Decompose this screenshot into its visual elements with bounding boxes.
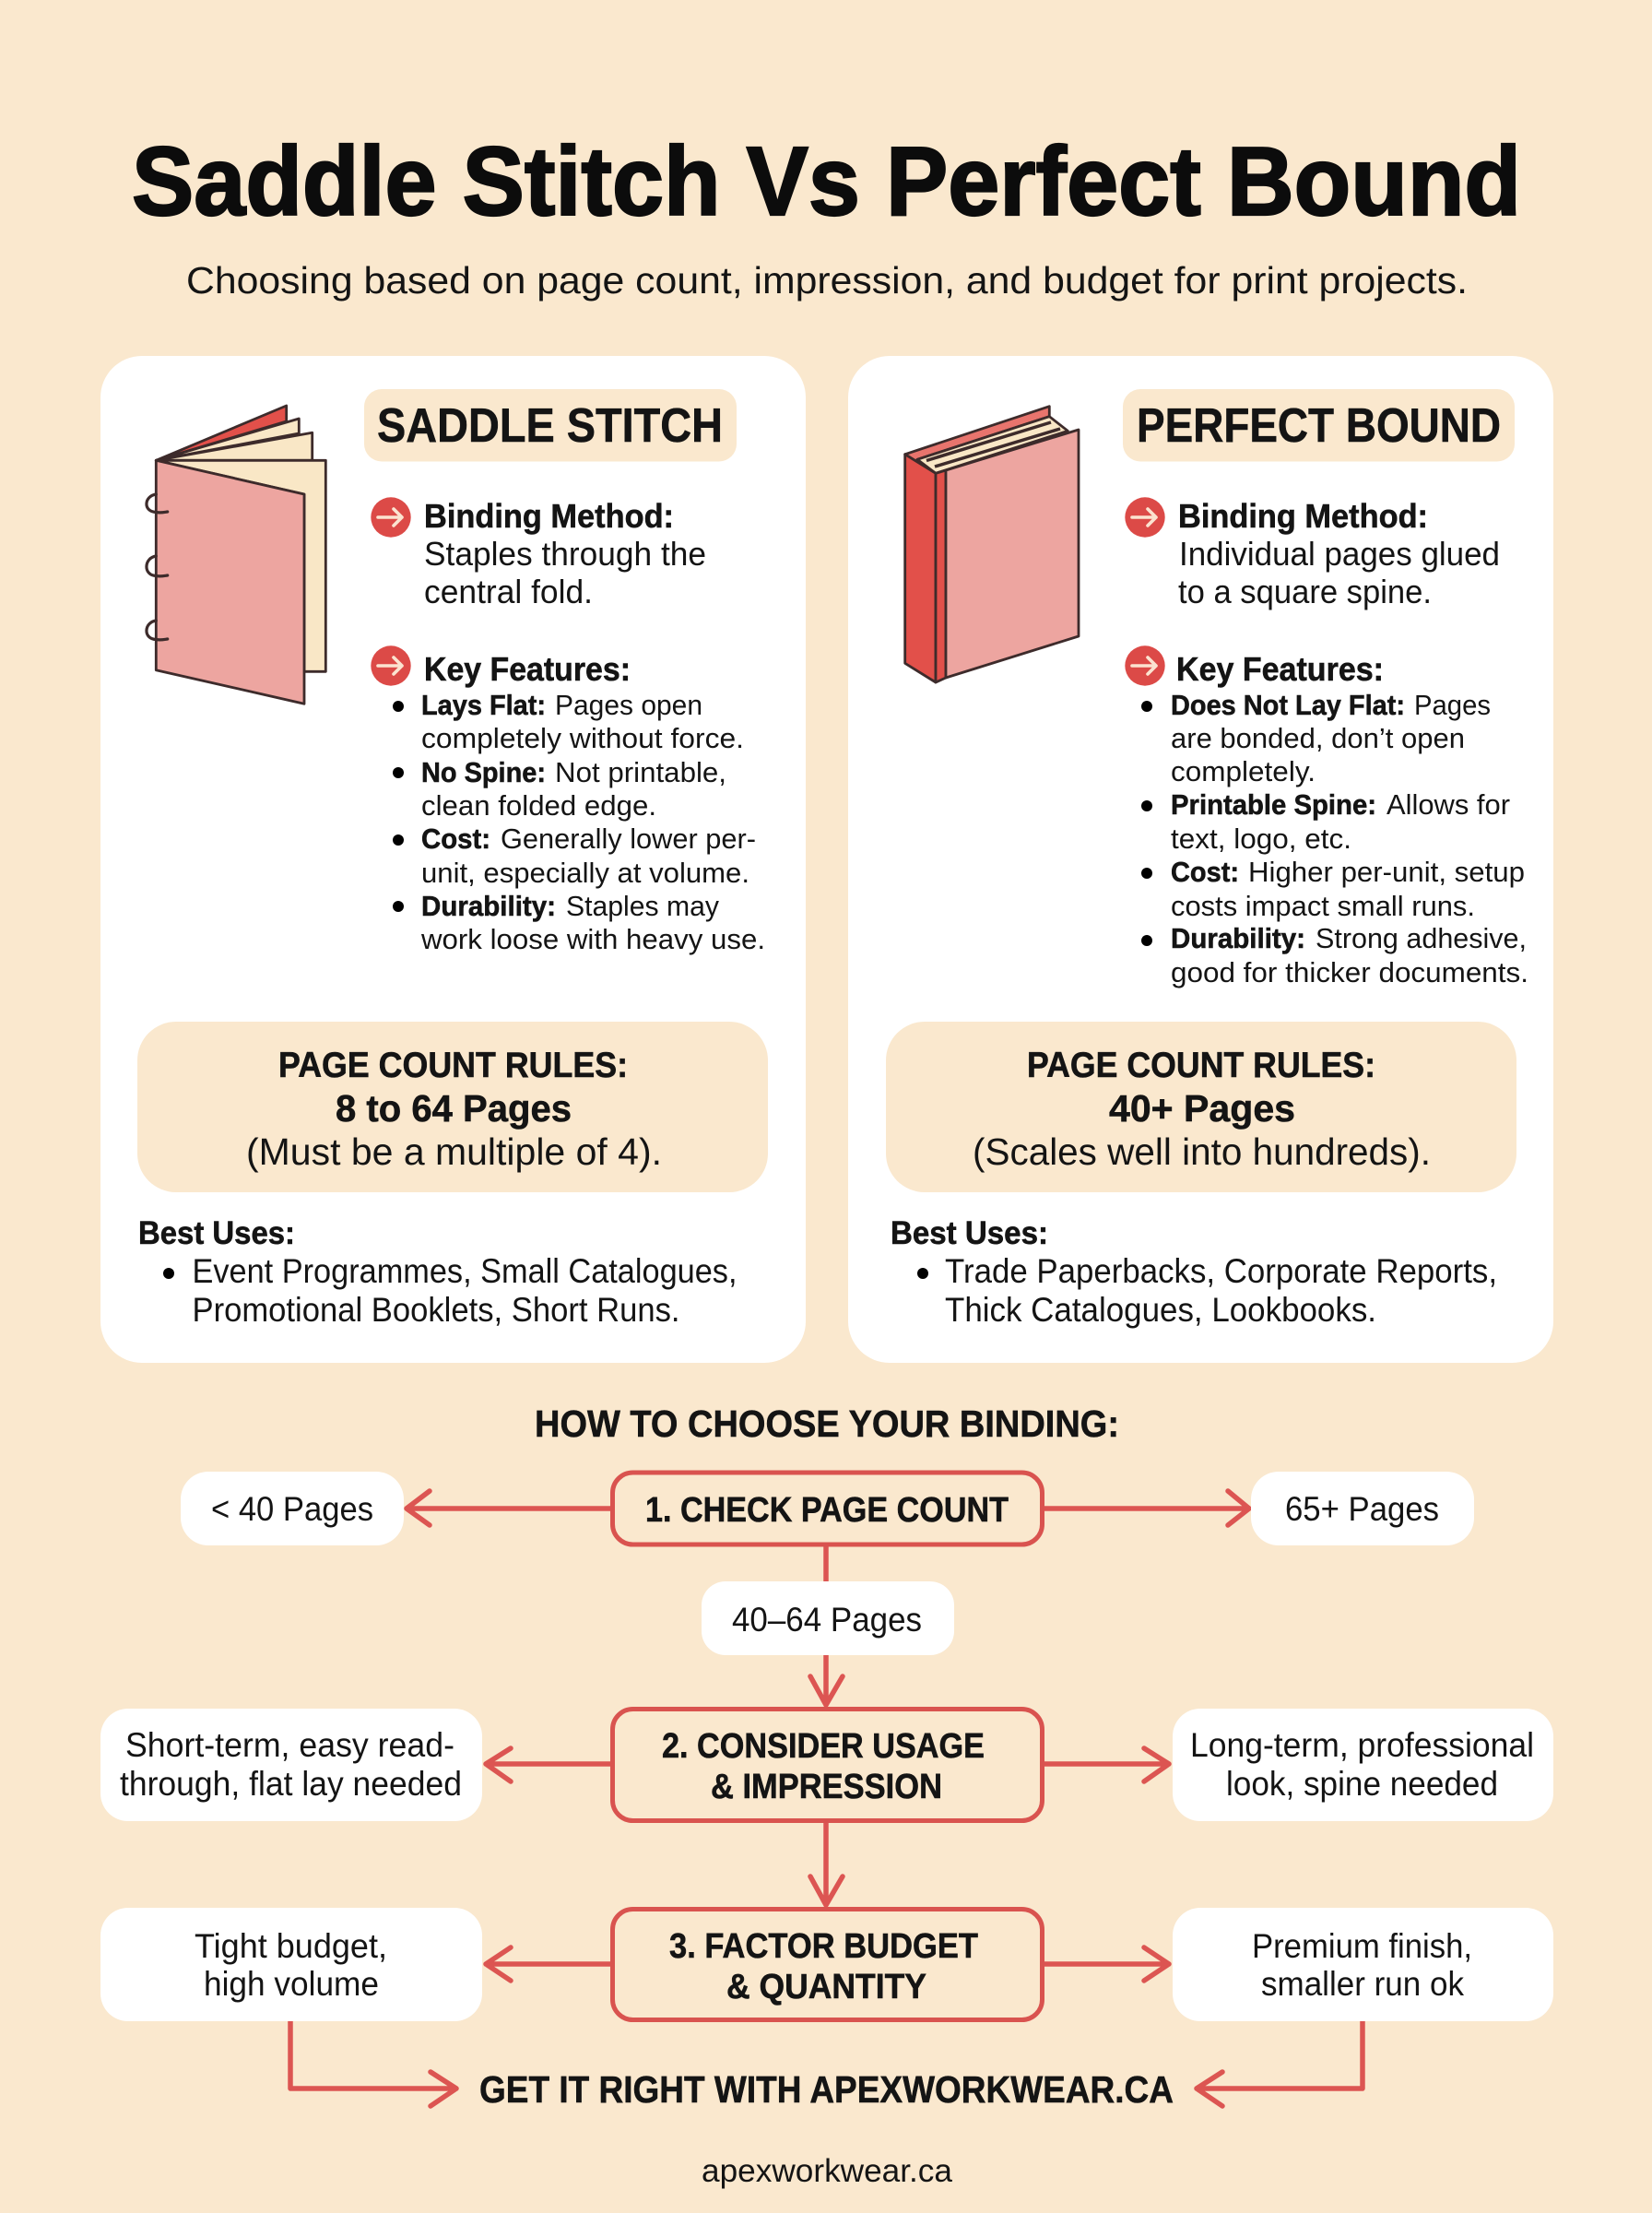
node: long-term: [1173, 1709, 1553, 1821]
text: binding method: Binding Method:: [424, 497, 674, 535]
node: short-term: through, flat lay needed: [120, 1765, 462, 1803]
node: premium finish: Premium finish,: [1252, 1927, 1472, 1965]
list: key features: No Spine:: [421, 756, 546, 788]
subtitle: Choosing based on page count, impression, and budget for print projects.: [186, 259, 1468, 302]
list: key features: Staples may: [566, 890, 719, 922]
list: key features: Does Not Lay Flat:: [1171, 689, 1405, 721]
heading pill: perfect bound: [1123, 389, 1515, 461]
node: step 3 factor budget: [612, 1909, 1042, 2019]
flowchart heading: HOW TO CHOOSE YOUR BINDING:: [535, 1402, 1119, 1445]
callout: page count rules: [886, 1022, 1516, 1192]
arrow: step 2 to long-term: [1043, 1748, 1169, 1781]
heading pill: saddle stitch: SADDLE STITCH: [377, 399, 723, 453]
node: short-term: [100, 1709, 482, 1821]
list: key features: [393, 689, 765, 955]
node: under 40 pages: < 40 Pages: [211, 1490, 373, 1528]
node: step 2 consider usage: & IMPRESSION: [711, 1768, 942, 1806]
card background: [848, 356, 1553, 1363]
arrow: step 1 down to step 2: [810, 1546, 843, 1705]
list: key features: good for thicker documents.: [1171, 956, 1528, 988]
callout: page count rules: (Must be a multiple of 4).: [246, 1130, 662, 1173]
node: tight budget: [100, 1908, 482, 2021]
list: key features: unit, especially at volume.: [421, 857, 749, 889]
icon: perfect bound book: [905, 407, 1079, 682]
list: key features: Pages: [1414, 689, 1491, 721]
arrow: step 3 to premium finish: [1043, 1947, 1169, 1981]
node: 40-64 pages: [702, 1581, 954, 1655]
title: Saddle Stitch Vs Perfect Bound: [132, 127, 1521, 236]
callout: page count rules: [137, 1022, 768, 1192]
node: tight budget: Tight budget,: [195, 1927, 387, 1965]
list: key features: [1141, 689, 1528, 988]
node: 40-64 pages: 40–64 Pages: [732, 1601, 922, 1639]
list: key features: completely.: [1171, 755, 1316, 787]
footer url: apexworkwear.ca: [702, 2153, 953, 2189]
list: key features: Pages open: [555, 689, 702, 721]
list: key features: costs impact small runs.: [1171, 890, 1475, 922]
node: premium finish: [1173, 1908, 1553, 2021]
list: key features: are bonded, don’t open: [1171, 722, 1465, 754]
list: key features: Allows for: [1386, 788, 1510, 821]
heading pill: perfect bound: PERFECT BOUND: [1137, 399, 1501, 453]
list: key features: Strong adhesive,: [1316, 922, 1527, 954]
heading pill: saddle stitch: [364, 389, 737, 461]
arrow: tight budget to call to action: [290, 2021, 456, 2106]
list: key features: Lays Flat:: [421, 689, 546, 721]
node: short-term: Short-term, easy read-: [125, 1726, 454, 1764]
node: tight budget: high volume: [204, 1965, 379, 2003]
text: binding method: Individual pages glued: [1179, 535, 1500, 573]
arrow: step 2 to short-term: [486, 1748, 612, 1781]
text: binding method: [424, 497, 706, 610]
flowchart: how to choose: [100, 1472, 1553, 2106]
node: step 1 check page count: 1. CHECK PAGE COUNT: [645, 1491, 1009, 1530]
text: binding method: Binding Method:: [1178, 497, 1428, 535]
text: best uses: [891, 1215, 1497, 1329]
icon: arrow bullet key features: [1125, 645, 1165, 686]
node: premium finish: smaller run ok: [1261, 1965, 1464, 2003]
text: best uses: [138, 1215, 738, 1329]
call to action: GET IT RIGHT WITH APEXWORKWEAR.CA: [479, 2068, 1174, 2111]
list: key features: Durability:: [1171, 922, 1305, 954]
list: key features: text, logo, etc.: [1171, 822, 1351, 855]
panel: perfect bound: [848, 356, 1553, 1363]
list: key features: clean folded edge.: [421, 789, 656, 822]
list: key features: Generally lower per-: [501, 822, 756, 855]
callout: page count rules: PAGE COUNT RULES:: [1027, 1046, 1375, 1085]
icon: saddle stitched booklet: [147, 406, 325, 704]
node: step 3 factor budget: & QUANTITY: [726, 1968, 926, 2006]
arrow: premium finish to call to action: [1197, 2021, 1363, 2106]
heading: key features: Key Features:: [424, 650, 631, 688]
callout: page count rules: 40+ Pages: [1109, 1087, 1295, 1130]
panel: saddle stitch: [100, 356, 806, 1363]
callout: page count rules: 8 to 64 Pages: [336, 1087, 572, 1130]
card background: [100, 356, 806, 1363]
list: key features: Printable Spine:: [1171, 788, 1376, 821]
text: best uses: Promotional Booklets, Short Runs.: [192, 1291, 680, 1329]
list: key features: work loose with heavy use.: [420, 923, 765, 955]
list: key features: Cost:: [1171, 856, 1239, 888]
arrow: step 3 to tight budget: [486, 1947, 612, 1981]
heading: key features: Key Features:: [1176, 650, 1384, 688]
list: key features: completely without force.: [421, 722, 744, 754]
node: step 3 factor budget: 3. FACTOR BUDGET: [669, 1927, 978, 1966]
arrow: step 1 to 65+ pages: [1043, 1491, 1249, 1525]
text: binding method: Staples through the: [424, 535, 706, 573]
text: best uses: Trade Paperbacks, Corporate Reports,: [945, 1252, 1497, 1290]
node: 65+ pages: [1251, 1472, 1474, 1545]
node: under 40 pages: [181, 1472, 404, 1545]
list: key features: Higher per-unit, setup: [1248, 856, 1525, 888]
text: binding method: [1178, 497, 1500, 610]
arrow: step 1 to under 40 pages: [407, 1491, 612, 1525]
list: key features: Not printable,: [555, 756, 726, 788]
icon: arrow bullet binding method: [1125, 497, 1165, 538]
text: best uses: Thick Catalogues, Lookbooks.: [945, 1291, 1376, 1329]
node: step 1 check page count: [612, 1473, 1042, 1544]
text: best uses: Event Programmes, Small Catalogues,: [192, 1252, 738, 1290]
text: best uses: Best Uses:: [138, 1215, 295, 1251]
node: long-term: Long-term, professional: [1190, 1726, 1534, 1764]
icon: arrow bullet binding method: [371, 497, 411, 538]
node: long-term: look, spine needed: [1226, 1765, 1498, 1803]
arrow: step 2 down to step 3: [810, 1821, 843, 1905]
list: key features: Cost:: [421, 822, 490, 855]
text: best uses: Best Uses:: [891, 1215, 1048, 1251]
callout: page count rules: (Scales well into hundreds).: [973, 1130, 1431, 1173]
list: key features: Durability:: [421, 890, 556, 922]
icon: arrow bullet key features: [371, 645, 411, 686]
node: step 2 consider usage: 2. CONSIDER USAGE: [662, 1727, 985, 1766]
text: binding method: central fold.: [424, 573, 593, 610]
callout: page count rules: PAGE COUNT RULES:: [278, 1046, 628, 1085]
text: binding method: to a square spine.: [1178, 573, 1432, 610]
node: step 2 consider usage: [612, 1710, 1042, 1820]
node: 65+ pages: 65+ Pages: [1285, 1490, 1439, 1528]
